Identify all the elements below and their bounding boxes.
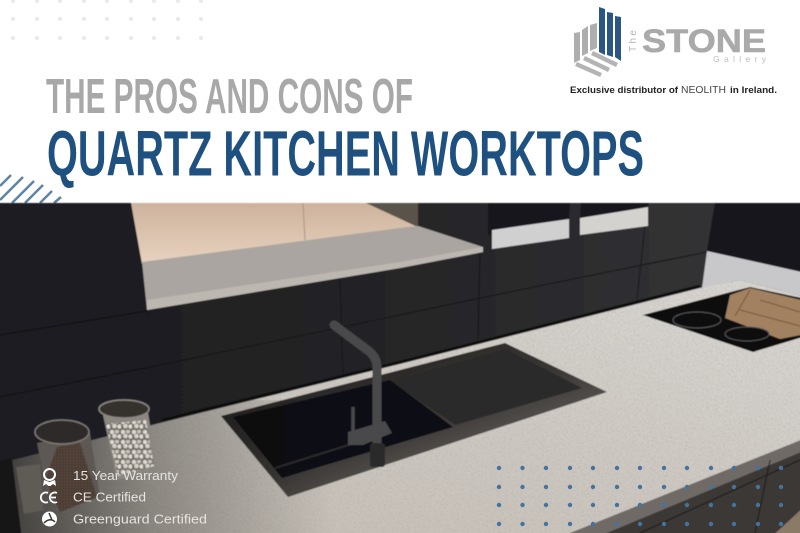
icon: Greenguard badge <box>42 512 57 526</box>
tagline: NEOLITH <box>681 85 726 96</box>
feature: CE certified <box>41 490 146 504</box>
jar centre <box>35 420 100 512</box>
decorative diagonal stripes <box>0 175 61 203</box>
icon: CE mark <box>41 492 57 503</box>
peach wall recess <box>131 203 420 264</box>
kitchen photo illustration <box>0 203 800 533</box>
feature: Greenguard certified: Greenguard Certified <box>73 512 207 526</box>
tagline: in Ireland. <box>730 85 777 96</box>
left tall cabinets <box>0 203 163 465</box>
sink <box>221 343 607 497</box>
feature: 15 year warranty: 15 Year Warranty <box>73 468 179 483</box>
title line 1: THE PROS AND CONS OF <box>46 70 413 124</box>
oven right <box>580 203 649 235</box>
dark shade on worktop behind features <box>0 400 334 533</box>
whisk <box>0 458 22 533</box>
logo: The: The <box>628 30 639 52</box>
island worktop <box>0 280 800 533</box>
logo mark <box>574 7 621 75</box>
jar right <box>99 400 157 480</box>
oven left <box>488 203 570 249</box>
tagline <box>570 85 777 96</box>
feature: 15 year warranty <box>43 468 179 486</box>
feature: CE certified: CE Certified <box>73 490 146 504</box>
header panel <box>0 0 800 203</box>
icon: award ribbon <box>43 469 56 486</box>
jar left <box>16 464 44 514</box>
decorative dot grid: top left <box>11 0 203 40</box>
features list <box>41 468 207 526</box>
decorative dot grid: bottom right <box>497 466 783 526</box>
logo: The Stone Gallery <box>570 7 777 96</box>
logo: Gallery: Gallery <box>713 54 767 64</box>
worktop front edge and base cabinets <box>553 438 800 533</box>
back wall right <box>702 203 800 297</box>
logo wordmark: STONE <box>642 23 766 59</box>
tagline: Exclusive distributor of <box>570 85 679 96</box>
induction hob <box>643 287 800 352</box>
upper shelf worktop <box>142 226 483 310</box>
lower cabinet run <box>147 203 715 420</box>
faucet <box>334 325 392 467</box>
